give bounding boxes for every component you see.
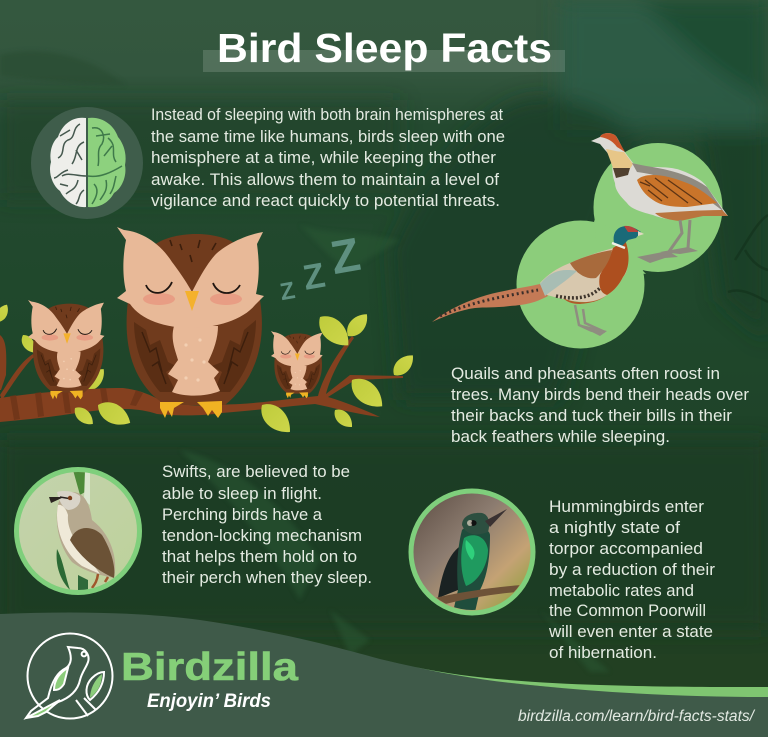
text block: hummingbirds: by a reduction of their: [549, 561, 716, 579]
illustration: pheasant: [432, 226, 644, 336]
text block: brain hemispheres: hemisphere at a time, while keeping the other: [151, 149, 497, 167]
icon: brain on dark circle: [31, 107, 143, 219]
text block: swifts: their perch when they sleep.: [162, 569, 372, 587]
leaves: [0, 302, 418, 439]
text block: quails and pheasants: back feathers while sleeping.: [451, 428, 670, 446]
title: Bird Sleep Facts: [217, 25, 552, 71]
branch: [0, 336, 403, 422]
text block: brain hemispheres: Instead of sleeping with both brain hemispheres at: [151, 106, 503, 124]
text block: hummingbirds: of hibernation.: [549, 644, 657, 662]
text block: hummingbirds: will even enter a state: [548, 623, 713, 641]
text block: quails and pheasants: [451, 365, 750, 446]
text block: hummingbirds: [548, 498, 716, 662]
text block: hummingbirds: a nightly state of: [549, 519, 680, 537]
source URL: birdzilla.com/learn/bird-facts-stats/: [518, 708, 756, 725]
icon: sleeping Z letters: Z: [278, 277, 297, 306]
logo: Birdzilla bird emblem: [26, 634, 112, 718]
text block: hummingbirds: Hummingbirds enter: [549, 498, 705, 516]
owl: small right: [271, 331, 323, 398]
illustration: quail: [591, 133, 728, 263]
owl: small left: [28, 300, 104, 399]
text block: hummingbirds: the Common Poorwill: [549, 602, 706, 620]
text block: swifts: tendon-locking mechanism: [162, 527, 362, 545]
photo: perching bird: [16, 470, 140, 595]
leaves behind the owls: [18, 332, 109, 395]
text block: brain hemispheres: the same time like humans, birds sleep with one: [151, 128, 505, 146]
logo tagline: Enjoyin' Birds: Enjoyin’ Birds: [147, 691, 271, 712]
logo wordmark: Birdzilla: Birdzilla: [121, 646, 298, 689]
text block: hummingbirds: metabolic rates and: [549, 582, 694, 600]
twig left: [0, 335, 34, 400]
green circles behind game birds: [516, 143, 722, 348]
text block: swifts: that helps them hold on to: [162, 548, 357, 566]
owl: large: [117, 227, 264, 418]
icon: sleeping Z letters: [278, 227, 364, 306]
text block: brain hemispheres: awake. This allows them to maintain a level of: [151, 171, 499, 189]
footer wave panel: [0, 612, 768, 737]
icon: sleeping Z letters: Z: [327, 227, 364, 284]
photo: hummingbird: [411, 491, 533, 613]
text block: swifts: Perching birds have a: [162, 506, 323, 524]
text block: quails and pheasants: Quails and pheasants often roost in: [451, 365, 720, 383]
text block: swifts: [162, 463, 372, 587]
text block: hummingbirds: torpor accompanied: [549, 540, 703, 558]
text block: brain hemispheres: vigilance and react quickly to potential threats.: [151, 192, 500, 210]
text block: swifts: Swifts, are believed to be: [162, 463, 350, 481]
text block: quails and pheasants: trees. Many birds bend their heads over: [451, 386, 750, 404]
text block: quails and pheasants: their backs and tuck their bills in their: [451, 407, 733, 425]
icon: sleeping Z letters: Z: [300, 256, 328, 298]
illustration: sleeping owls on branch: [0, 227, 418, 439]
text block: brain hemispheres: [151, 106, 505, 210]
text block: swifts: able to sleep in flight.: [162, 485, 322, 503]
